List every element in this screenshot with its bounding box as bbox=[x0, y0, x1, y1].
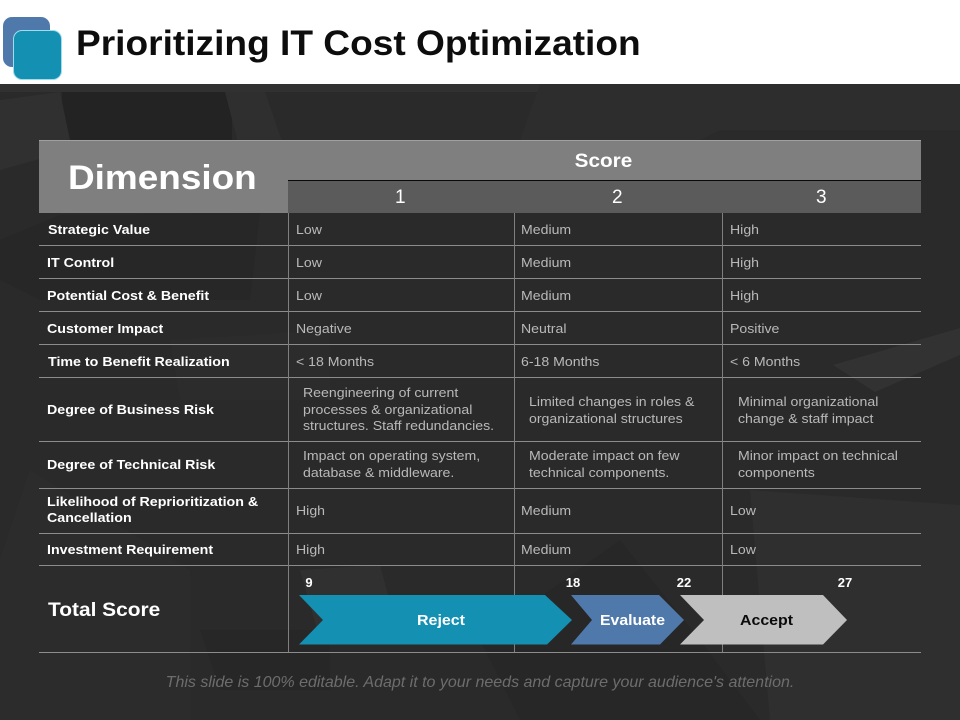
row: Degree of Business Risk: Reengineering of current bbox=[303, 385, 458, 400]
row: Likelihood of Reprioritization & Cancellation: Medium bbox=[521, 503, 571, 518]
row: Degree of Technical Risk: technical components. bbox=[529, 464, 669, 480]
row: Degree of Technical Risk: database & middleware. bbox=[303, 464, 454, 480]
row: Customer Impact: Customer Impact bbox=[47, 321, 163, 336]
row: Potential Cost & Benefit: Potential Cost & Benefit bbox=[47, 288, 209, 303]
panel: score header bbox=[288, 140, 921, 180]
heading: Dimension: Dimension bbox=[68, 159, 257, 197]
row: Customer Impact: Neutral bbox=[521, 321, 566, 336]
score 3: 3 bbox=[816, 187, 827, 208]
row: Likelihood of Reprioritization & Cancellation: High bbox=[296, 503, 325, 518]
value 22: 22 bbox=[677, 575, 691, 590]
row: IT Control: IT Control bbox=[47, 255, 114, 270]
row: Degree of Technical Risk: Impact on operating system, bbox=[303, 448, 480, 463]
row: Time to Benefit Realization: < 6 Months bbox=[730, 354, 800, 369]
arrow: Evaluate bbox=[571, 595, 684, 644]
arrow: Reject bbox=[299, 595, 572, 644]
row: Strategic Value: Strategic Value bbox=[48, 222, 150, 237]
row: Customer Impact: Positive bbox=[730, 321, 779, 336]
row: Strategic Value bbox=[48, 222, 759, 237]
row: Degree of Business Risk bbox=[47, 385, 878, 433]
row: Potential Cost & Benefit bbox=[47, 288, 759, 303]
heading: Score: Score bbox=[575, 151, 632, 172]
row: Degree of Technical Risk: Degree of Technical Risk bbox=[47, 457, 215, 472]
row: Degree of Technical Risk: Moderate impact on few bbox=[529, 448, 680, 463]
panel: score columns 1 2 3 bbox=[288, 180, 921, 213]
row: Degree of Technical Risk: components bbox=[738, 464, 815, 480]
label: Total Score: Total Score bbox=[48, 600, 160, 621]
row: Degree of Business Risk: organizational structures bbox=[529, 410, 683, 426]
row: Degree of Technical Risk: Minor impact on technical bbox=[738, 448, 898, 463]
row: Strategic Value: High bbox=[730, 222, 759, 237]
arrow: Accept: Accept bbox=[740, 613, 793, 629]
value 9: 9 bbox=[305, 575, 313, 590]
row: Potential Cost & Benefit: Low bbox=[296, 288, 322, 303]
row: Degree of Business Risk: change & staff impact bbox=[738, 410, 873, 426]
row: Time to Benefit Realization: Time to Benefit Realization bbox=[48, 354, 230, 369]
row: Likelihood of Reprioritization & Cancellation: Low bbox=[730, 503, 756, 518]
row: Customer Impact: Negative bbox=[296, 321, 352, 336]
row: Degree of Business Risk: Minimal organizational bbox=[738, 394, 878, 409]
arrow: Reject: Reject bbox=[417, 613, 465, 629]
chart: score range arrows bbox=[299, 575, 852, 644]
row: Potential Cost & Benefit: High bbox=[730, 288, 759, 303]
panel: dimension header bbox=[39, 140, 288, 213]
row: Customer Impact bbox=[47, 321, 779, 336]
row: Likelihood of Reprioritization & Cancellation bbox=[47, 494, 756, 525]
row: Time to Benefit Realization bbox=[48, 354, 800, 369]
row: Potential Cost & Benefit: Medium bbox=[521, 288, 571, 303]
row: Likelihood of Reprioritization & Cancellation: Cancellation bbox=[47, 510, 132, 525]
value 27: 27 bbox=[838, 575, 852, 590]
row: Degree of Technical Risk bbox=[47, 448, 898, 480]
row: Time to Benefit Realization: 6-18 Months bbox=[521, 354, 599, 369]
row: Strategic Value: Medium bbox=[521, 222, 571, 237]
row: Degree of Business Risk: Degree of Business Risk bbox=[47, 402, 214, 417]
row: Investment Requirement: High bbox=[296, 542, 325, 557]
score 1: 1 bbox=[395, 187, 406, 208]
row: IT Control: Medium bbox=[521, 255, 571, 270]
title: Prioritizing IT Cost Optimization bbox=[76, 23, 641, 63]
row: Investment Requirement bbox=[47, 542, 756, 557]
row: IT Control: Low bbox=[296, 255, 322, 270]
score 2: 2 bbox=[612, 187, 623, 208]
icon: overlapping rounded squares bbox=[3, 17, 62, 80]
row: Strategic Value: Low bbox=[296, 222, 322, 237]
row: Degree of Business Risk: structures. Staff redundancies. bbox=[303, 418, 494, 433]
row: Likelihood of Reprioritization & Cancellation: Likelihood of Reprioritization & bbox=[47, 494, 258, 509]
arrow: Evaluate: Evaluate bbox=[600, 613, 665, 629]
arrow: Accept bbox=[680, 595, 847, 644]
row: Investment Requirement: Medium bbox=[521, 542, 571, 557]
row: IT Control bbox=[47, 255, 759, 270]
row: Investment Requirement: Low bbox=[730, 542, 756, 557]
row: Investment Requirement: Investment Requirement bbox=[47, 542, 213, 557]
footer note: This slide is 100% editable. Adapt it to your needs and capture your audience's attention. bbox=[166, 674, 794, 691]
row: IT Control: High bbox=[730, 255, 759, 270]
row: Degree of Business Risk: Limited changes in roles & bbox=[529, 394, 694, 409]
value 18: 18 bbox=[566, 575, 580, 590]
row: Time to Benefit Realization: < 18 Months bbox=[296, 354, 374, 369]
row: Degree of Business Risk: processes & organizational bbox=[303, 402, 472, 416]
